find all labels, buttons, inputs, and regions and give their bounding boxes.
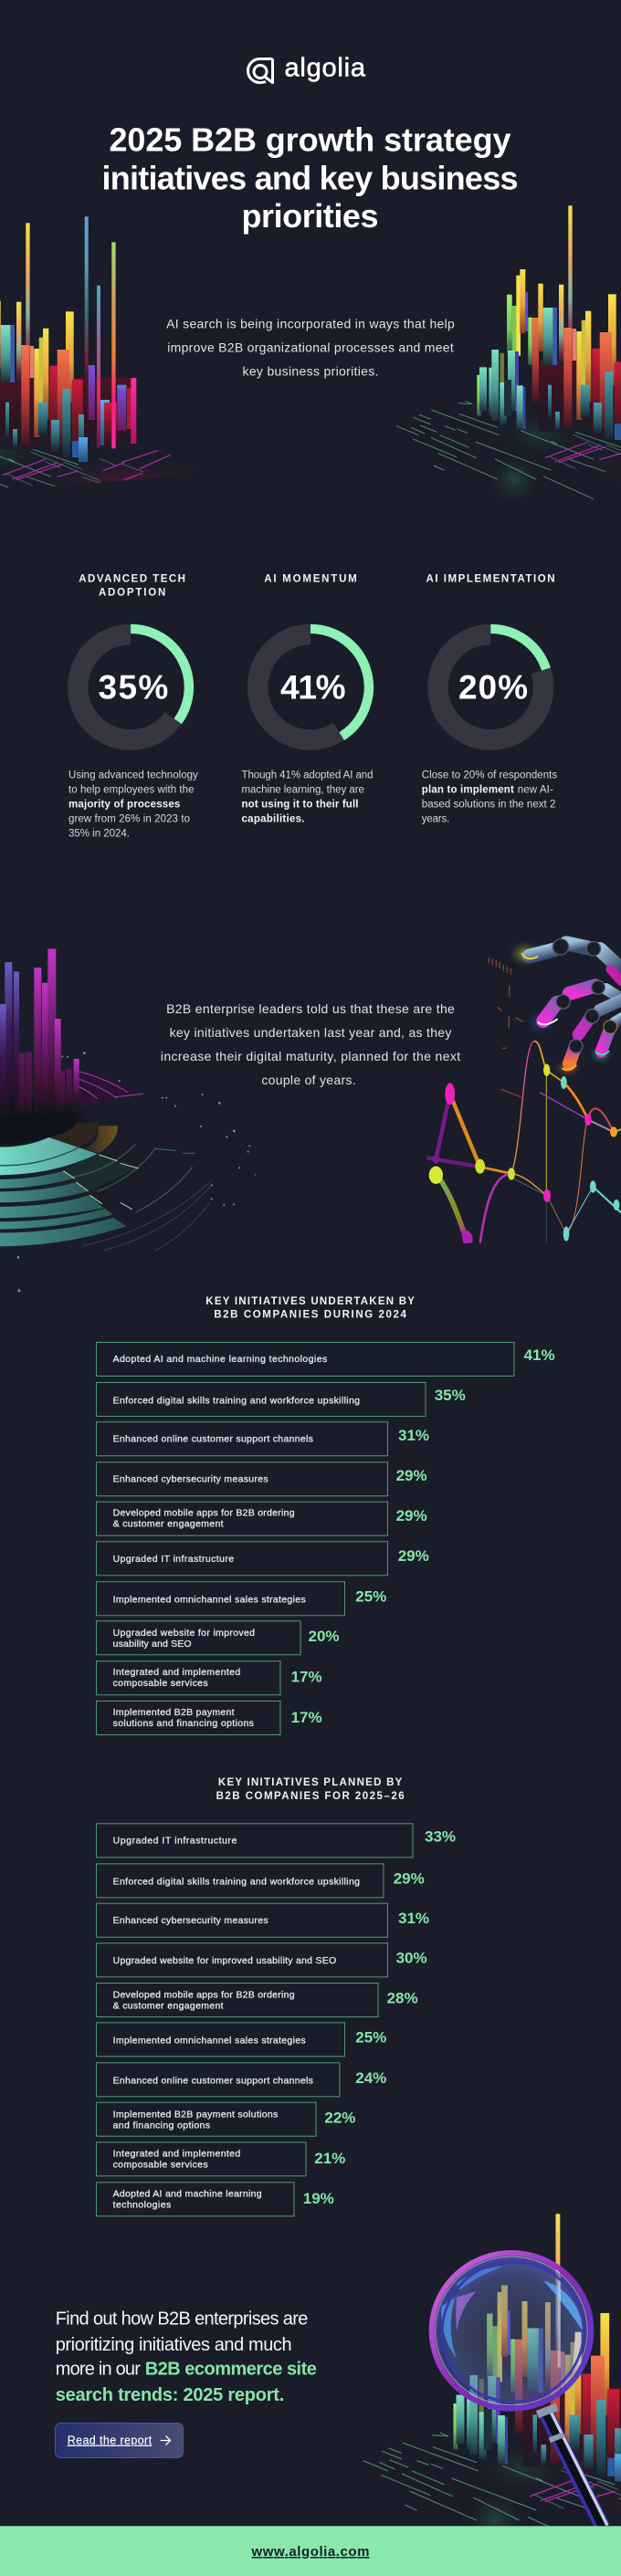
bar 31%: Enhanced online customer support channels (113, 1434, 313, 1445)
mid text: increase their digital maturity, planned for the next (161, 1049, 460, 1063)
bar 31%: 31% (398, 1910, 429, 1927)
bar 21%: 21% (314, 2150, 345, 2167)
description: majority of processes (68, 800, 180, 811)
bar 24%: 24% (355, 2069, 386, 2087)
bar 19% (97, 2183, 334, 2216)
illustration: speck (18, 1289, 20, 1293)
cta text: prioritizing initiatives and much (56, 2335, 292, 2355)
bar 29%: Developed mobile apps for B2B ordering (113, 1508, 295, 1519)
mid text: key initiatives undertaken last year and, as they (170, 1025, 451, 1040)
illustration: city behind magnifier (363, 2206, 621, 2551)
bar 22%: and financing options (113, 2120, 210, 2131)
chart lines (426, 1042, 621, 1243)
illustration: magnifying glass (432, 2253, 607, 2528)
illustration: robot hand and line chart (426, 939, 621, 1243)
bar 41%: Adopted AI and machine learning technologies (113, 1354, 327, 1365)
bar 17% (97, 1702, 322, 1734)
ring (432, 2253, 591, 2409)
bar 25%: Implemented omnichannel sales strategies (113, 2036, 306, 2047)
bar 29%: Enhanced cybersecurity measures (113, 1474, 268, 1485)
bar 29% (97, 1542, 429, 1576)
bar 29%: 29% (396, 1507, 427, 1524)
bar 33% (97, 1824, 456, 1858)
description: based solutions in the next 2 (422, 800, 555, 811)
icon: algolia mark (248, 58, 272, 82)
heading: ADOPTION (99, 588, 165, 599)
description: Using advanced technology (68, 770, 198, 781)
bar 35%: Enforced digital skills training and workforce upskilling (113, 1395, 360, 1406)
bar 30% (97, 1943, 427, 1977)
bar 25% (97, 2023, 386, 2057)
cta text (56, 2309, 317, 2405)
icon: arrow (161, 2435, 170, 2445)
cta text: search trends: 2025 report. (56, 2385, 284, 2405)
title (102, 120, 519, 235)
donut chart 35% (78, 629, 189, 739)
donut chart 35%: 35% (99, 669, 168, 707)
mid text: B2B enterprise leaders told us that these are the (166, 1001, 455, 1016)
illustration: left data city (0, 216, 177, 487)
donut chart 20%: 20% (458, 669, 528, 707)
intro text (166, 316, 455, 378)
intro text: key business priorities. (243, 363, 378, 378)
description (68, 770, 198, 840)
bar 29% (97, 1462, 427, 1496)
bar 35%: 35% (435, 1387, 466, 1404)
bar 17% (97, 1661, 322, 1695)
panel: ai momentum (241, 573, 373, 825)
illustration: right data city (396, 199, 621, 507)
handle (537, 2407, 607, 2528)
donut chart 20% (438, 629, 546, 739)
description: Close to 20% of respondents (422, 770, 557, 781)
bar 17%: 17% (291, 1709, 322, 1726)
footer band: www.algolia.com (250, 2544, 369, 2560)
bar 22%: 22% (324, 2109, 355, 2127)
bar 19%: technologies (113, 2199, 171, 2210)
description: 35% in 2024. (68, 829, 130, 840)
description: years. (422, 814, 449, 825)
donut chart 41% (258, 629, 369, 739)
bar 35% (97, 1382, 466, 1417)
bar 19%: Adopted AI and machine learning (113, 2188, 262, 2199)
finger 4 (596, 1018, 621, 1054)
bar 20% (97, 1621, 340, 1655)
bar 31%: 31% (398, 1427, 429, 1444)
logo: algolia: algolia (285, 53, 366, 82)
bar 17%: composable services (113, 1678, 208, 1689)
bar 29%: 29% (394, 1869, 425, 1888)
intro text: AI search is being incorporated in ways that help (166, 316, 455, 330)
bar 41%: 41% (524, 1346, 555, 1364)
finger 2 (538, 980, 621, 1024)
bar 17%: Integrated and implemented (113, 1667, 240, 1678)
bar 22% (97, 2102, 355, 2136)
chart nodes (429, 1064, 619, 1243)
description: machine learning, they are (241, 785, 364, 796)
description (241, 770, 373, 825)
heading: B2B COMPANIES FOR 2025–26 (216, 1791, 405, 1802)
heading: AI IMPLEMENTATION (426, 573, 555, 584)
bar 20%: usability and SEO (113, 1639, 192, 1649)
bar 29%: Enforced digital skills training and workforce upskilling (113, 1877, 360, 1888)
bar 21%: composable services (113, 2159, 208, 2170)
bar 31% (97, 1422, 429, 1456)
panel: ai implementation (422, 573, 557, 825)
bar 41% (97, 1342, 555, 1377)
bar 31%: Enhanced cybersecurity measures (113, 1915, 268, 1926)
bar 25%: 25% (355, 2028, 386, 2047)
bar 20%: 20% (309, 1628, 340, 1645)
bar 24% (97, 2063, 386, 2097)
bar 28%: & customer engagement (113, 2000, 224, 2011)
bar 31% (97, 1903, 429, 1937)
bar 28%: 28% (387, 1990, 418, 2006)
finger 3 (563, 1000, 621, 1070)
bar 29% (97, 1864, 425, 1898)
faint chart ticks (489, 958, 523, 1097)
heading (205, 1296, 415, 1321)
illustration: radial chart with purple bars (0, 948, 256, 1259)
title: 2025 B2B growth strategy (110, 120, 511, 158)
description: new AI- (518, 785, 553, 796)
panel: chart 2025-26 (97, 1777, 456, 2216)
description: not using it to their full (241, 800, 358, 811)
button: read the report (55, 2423, 183, 2457)
bar 29% (97, 1502, 427, 1535)
bar 29%: Upgraded IT infrastructure (113, 1554, 234, 1565)
heading: B2B COMPANIES DURING 2024 (214, 1310, 407, 1321)
footer band (0, 2526, 621, 2576)
bar 21%: Integrated and implemented (113, 2148, 240, 2159)
bar 28%: Developed mobile apps for B2B ordering (113, 1989, 295, 2000)
bars (97, 1824, 456, 2216)
bar 21% (97, 2142, 345, 2176)
panel: advanced tech adoption (68, 573, 198, 840)
bar 17%: solutions and financing options (113, 1718, 254, 1729)
description: Though 41% adopted AI and (241, 770, 373, 781)
bar 17%: 17% (291, 1669, 322, 1685)
bar 17%: Implemented B2B payment (113, 1707, 235, 1718)
heading (79, 573, 185, 599)
description: to help employees with the (68, 785, 194, 796)
finger 1 (522, 939, 621, 981)
heading: KEY INITIATIVES PLANNED BY (218, 1777, 403, 1788)
title: priorities (241, 197, 378, 235)
bar 29%: 29% (398, 1547, 429, 1565)
description: capabilities. (241, 814, 305, 825)
logo: algolia (248, 53, 366, 82)
title: initiatives and key business (102, 159, 519, 197)
description (422, 770, 557, 825)
bar 25% (97, 1582, 386, 1616)
description: plan to implement (422, 785, 514, 796)
cta text: more in our (56, 2360, 141, 2380)
bar 33%: Upgraded IT infrastructure (113, 1835, 237, 1846)
bar 24%: Enhanced online customer support channels (113, 2076, 313, 2087)
bar 30%: Upgraded website for improved usability and SEO (113, 1955, 336, 1966)
bar 22%: Implemented B2B payment solutions (113, 2109, 278, 2120)
bar 28% (97, 1983, 418, 2017)
intro text: improve B2B organizational processes and meet (167, 340, 454, 354)
heading: AI MOMENTUM (264, 573, 357, 584)
bar 29%: & customer engagement (113, 1519, 224, 1530)
mid text: couple of years. (261, 1073, 356, 1087)
bars (97, 1342, 555, 1734)
bar 29%: 29% (396, 1467, 427, 1484)
donut chart 41%: 41% (280, 669, 346, 707)
heading: KEY INITIATIVES UNDERTAKEN BY (205, 1296, 415, 1307)
bar 19%: 19% (303, 2190, 334, 2207)
description: grew from 26% in 2023 to (68, 814, 190, 825)
bar 25%: Implemented omnichannel sales strategies (113, 1594, 306, 1605)
bar 30%: 30% (396, 1950, 427, 1966)
cta text: B2B ecommerce site (145, 2360, 317, 2380)
lens (436, 2257, 587, 2405)
mid text (161, 1001, 460, 1087)
bar 33%: 33% (425, 1827, 456, 1846)
bar 20%: Upgraded website for improved (113, 1628, 255, 1639)
button: read the report: Read the report (68, 2434, 153, 2446)
heading (216, 1777, 405, 1802)
heading: ADVANCED TECH (79, 573, 185, 584)
bar 25%: 25% (355, 1588, 386, 1605)
cta text: Find out how B2B enterprises are (56, 2309, 308, 2330)
panel: chart 2024 (97, 1296, 555, 1734)
